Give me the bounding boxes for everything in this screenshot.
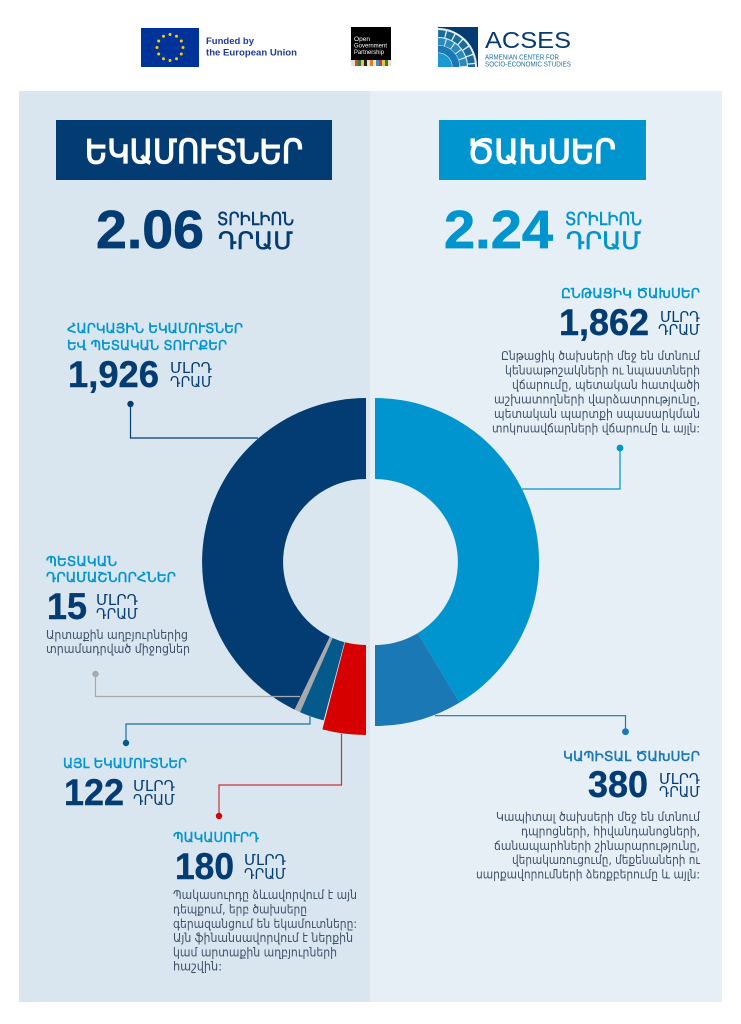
- callout: capital expenses: [435, 716, 701, 882]
- callout: capital expenses: սարքավորումների ձեռքբերումը և այլն:: [476, 868, 700, 882]
- total: revenues 2.06 trillion dram: ՏՐԻԼԻՈՆ: [217, 209, 294, 230]
- segment: capital expenses: [375, 633, 460, 726]
- callout: other revenues: ԱՅԼ ԵԿԱՄՈՒՏՆԵՐ: [63, 756, 187, 772]
- callout: capital expenses: վերակառուցումը, մեքենաների ու: [512, 853, 701, 867]
- callout: state grants: ԴՐԱՄ: [96, 605, 138, 623]
- segment: other revenues: [300, 638, 344, 720]
- callout: current expenses: տոկոսավճարների վճարումը և այլն:: [492, 422, 700, 436]
- callout: current expenses: աշխատողների վարձատրությունը,: [494, 392, 700, 406]
- callout: state grants: ՊԵՏԱԿԱՆ: [46, 554, 117, 570]
- callout: state grants: 15: [47, 586, 87, 627]
- logo: Open Government Partnership: Partnership: [354, 50, 385, 56]
- total: expenses 2.24 trillion dram: ԴՐԱՄ: [566, 227, 641, 255]
- callout: deficit: 180: [175, 846, 234, 887]
- total: revenues 2.06 trillion dram: 2.06: [96, 200, 204, 260]
- callout: capital expenses: ԿԱՊԻՏԱԼ ԾԱԽՍԵՐ: [563, 749, 700, 765]
- logo: Funded by the European Union: [141, 28, 297, 67]
- total: expenses 2.24 trillion dram: ՏՐԻԼԻՈՆ: [565, 209, 642, 230]
- callout: state grants: տրամադրված միջոցներ: [46, 642, 190, 656]
- total: revenues 2.06 trillion dram: ԴՐԱՄ: [218, 227, 293, 255]
- callout: other revenues: ՄԼՐԴ: [133, 777, 175, 795]
- callout: other revenues: 122: [64, 772, 124, 813]
- callout: other revenues: [63, 715, 310, 813]
- callout: tax revenues and state duties: [67, 321, 258, 438]
- logo: Open Government Partnership: Government: [354, 44, 387, 50]
- callout: deficit: [173, 734, 357, 974]
- panel: expenses background: [370, 91, 722, 1002]
- callout: capital expenses: ճանապարհների շինարարությունը,: [494, 839, 700, 853]
- callout: tax revenues and state duties: ԵՎ ՊԵՏԱԿԱՆ ՏՈՒՐՔԵՐ: [67, 338, 227, 354]
- callout: state grants: ԴՐԱՄԱՇՆՈՐՀՆԵՐ: [46, 570, 176, 586]
- callout: capital expenses: ԴՐԱՄ: [659, 783, 700, 801]
- donut chart: [202, 398, 539, 735]
- callout: deficit: ՄԼՐԴ: [244, 851, 286, 869]
- heading: revenues: ԵԿԱՄՈՒՏՆԵՐ: [85, 132, 303, 171]
- total: expenses 2.24 trillion dram: 2.24: [444, 200, 553, 260]
- callout: current expenses: [492, 286, 700, 489]
- logo: Funded by the European Union: Funded by: [206, 36, 255, 47]
- logo: ACSES: ARMENIAN CENTER FOR: [485, 54, 559, 62]
- callout: capital expenses: դպրոցների, հիվանդանոցների,: [521, 824, 700, 838]
- logo: Open Government Partnership: [351, 27, 391, 66]
- total: revenues 2.06 trillion dram: [96, 200, 294, 260]
- callout: deficit: Այն ֆինանսավորվում է ներքին: [173, 931, 353, 945]
- callout: tax revenues and state duties: ՄԼՐԴ: [170, 359, 212, 377]
- segment: state grants: [295, 637, 333, 712]
- logo: Open Government Partnership: Open: [354, 37, 370, 43]
- callout: deficit: դեպքում, երբ ծախսերը: [173, 902, 307, 916]
- heading: expenses: ԾԱԽՍԵՐ: [467, 132, 616, 171]
- callout: deficit: ԴՐԱՄ: [244, 865, 286, 883]
- callout: deficit: գերազանցում են եկամուտները:: [173, 917, 357, 931]
- callout: current expenses: պետական պարտքի սպասարկման: [494, 407, 700, 421]
- segment: current expenses: [375, 398, 539, 703]
- callout: deficit: Պակասուրդը ձևավորվում է այն: [173, 888, 357, 902]
- callout: current expenses: 1,862: [559, 302, 649, 343]
- callout: current expenses: վճարումը, պետական հատվածի: [512, 378, 700, 392]
- callout: state grants: ՄԼՐԴ: [96, 591, 138, 609]
- logo: ACSES: ACSES: [485, 27, 571, 53]
- heading: expenses: [439, 120, 646, 180]
- logo: Funded by the European Union: the European Union: [206, 48, 297, 58]
- callout: tax revenues and state duties: 1,926: [68, 354, 159, 395]
- callout: capital expenses: ՄԼՐԴ: [659, 770, 700, 788]
- callout: current expenses: Ընթացիկ ծախսերի մեջ են մտնում: [501, 349, 700, 363]
- callout: other revenues: ԴՐԱՄ: [133, 791, 175, 809]
- callout: capital expenses: Կապիտալ ծախսերի մեջ են մտնում: [496, 810, 700, 824]
- callout: current expenses: ԴՐԱՄ: [658, 321, 700, 339]
- segment: tax revenues and state duties: [202, 398, 366, 710]
- logo: ACSES: SOCIO-ECONOMIC STUDIES: [485, 62, 571, 68]
- callout: deficit: հաշվին:: [173, 960, 222, 974]
- callout: state grants: Արտաքին աղբյուրներից: [46, 628, 188, 642]
- callout: deficit: ՊԱԿԱՍՈՒՐԴ: [173, 830, 259, 846]
- callout: state grants: [46, 554, 300, 696]
- segment: deficit: [322, 642, 366, 735]
- logo: ACSES: [438, 27, 571, 67]
- callout: current expenses: ԸՆԹԱՑԻԿ ԾԱԽՍԵՐ: [561, 286, 700, 302]
- callout: deficit: կամ արտաքին աղբյուրների: [173, 946, 337, 960]
- callout: capital expenses: 380: [588, 764, 648, 805]
- callout: tax revenues and state duties: ԴՐԱՄ: [170, 373, 212, 391]
- panel: revenues background: [19, 91, 370, 1002]
- total: expenses 2.24 trillion dram: [444, 200, 642, 260]
- callout: tax revenues and state duties: ՀԱՐԿԱՅԻՆ ԵԿԱՄՈՒՏՆԵՐ: [67, 321, 243, 337]
- callout: current expenses: ՄԼՐԴ: [660, 308, 700, 326]
- heading: revenues: [56, 120, 332, 180]
- callout: current expenses: կենսաթոշակների ու նպաստների: [505, 364, 700, 378]
